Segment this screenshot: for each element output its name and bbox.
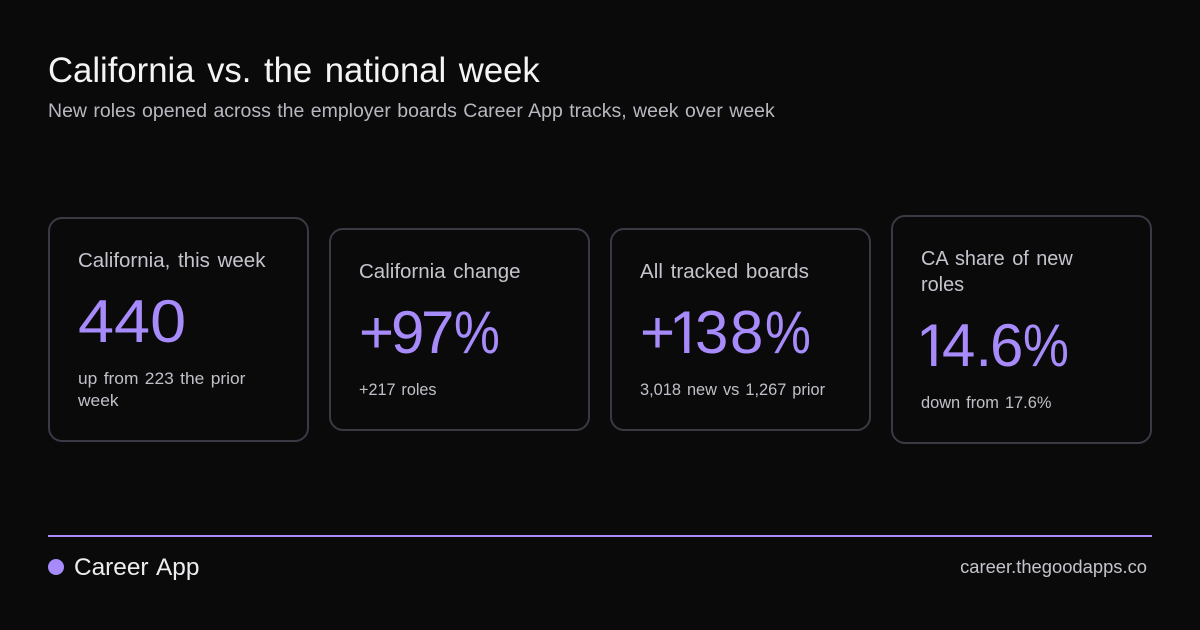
note: 3,018 new vs 1,267 prior: 3,018 new vs 1,267 prior: [640, 380, 825, 399]
label: CA share of new roles: [921, 247, 1073, 296]
label: California change: California change: [359, 260, 521, 283]
value: 14.6%: 1: [916, 312, 942, 379]
value: +97%: [359, 299, 500, 366]
label: CA share of new roles: roles: [921, 273, 964, 296]
note: +217 roles: +217 roles: [359, 380, 437, 399]
value: +138%: 1: [669, 299, 695, 366]
panel: California this week: [48, 217, 309, 442]
note: up from 223: [78, 369, 246, 410]
label: All tracked boards: All tracked boards: [640, 260, 809, 283]
value: +138%: + 38: [640, 299, 765, 366]
value: 14.6%: [922, 312, 1069, 379]
label: California, this week: California, this week: [78, 249, 265, 272]
panel: CA share of new roles: [891, 215, 1152, 444]
note: up from 223: up from 223 the prior: [78, 369, 245, 388]
subtitle: New roles opened across the employer boards Career App tracks, week over week: [48, 101, 775, 122]
value: 14.6%: 4.6: [942, 312, 1023, 379]
note: down from 17.6%: down from 17.6%: [921, 393, 1051, 412]
panel: All tracked boards: [610, 228, 871, 431]
value: +97%: +97: [359, 299, 454, 366]
title: California vs. the national week: [48, 50, 540, 90]
value: 440: 440: [78, 288, 186, 355]
value: +138%: %: [765, 299, 811, 366]
icon: brand dot: [48, 559, 64, 575]
value: 14.6%: %: [1023, 312, 1069, 379]
value: +97%: %: [454, 299, 500, 366]
label: CA share of new roles: CA share of new: [921, 247, 1073, 270]
footer url: career.thegoodapps.co: [960, 556, 1147, 577]
note: up from 223: week: [78, 391, 119, 410]
footer rule: [48, 535, 1152, 537]
brand name: Career App: [74, 554, 199, 581]
panel: California change: [329, 228, 590, 431]
